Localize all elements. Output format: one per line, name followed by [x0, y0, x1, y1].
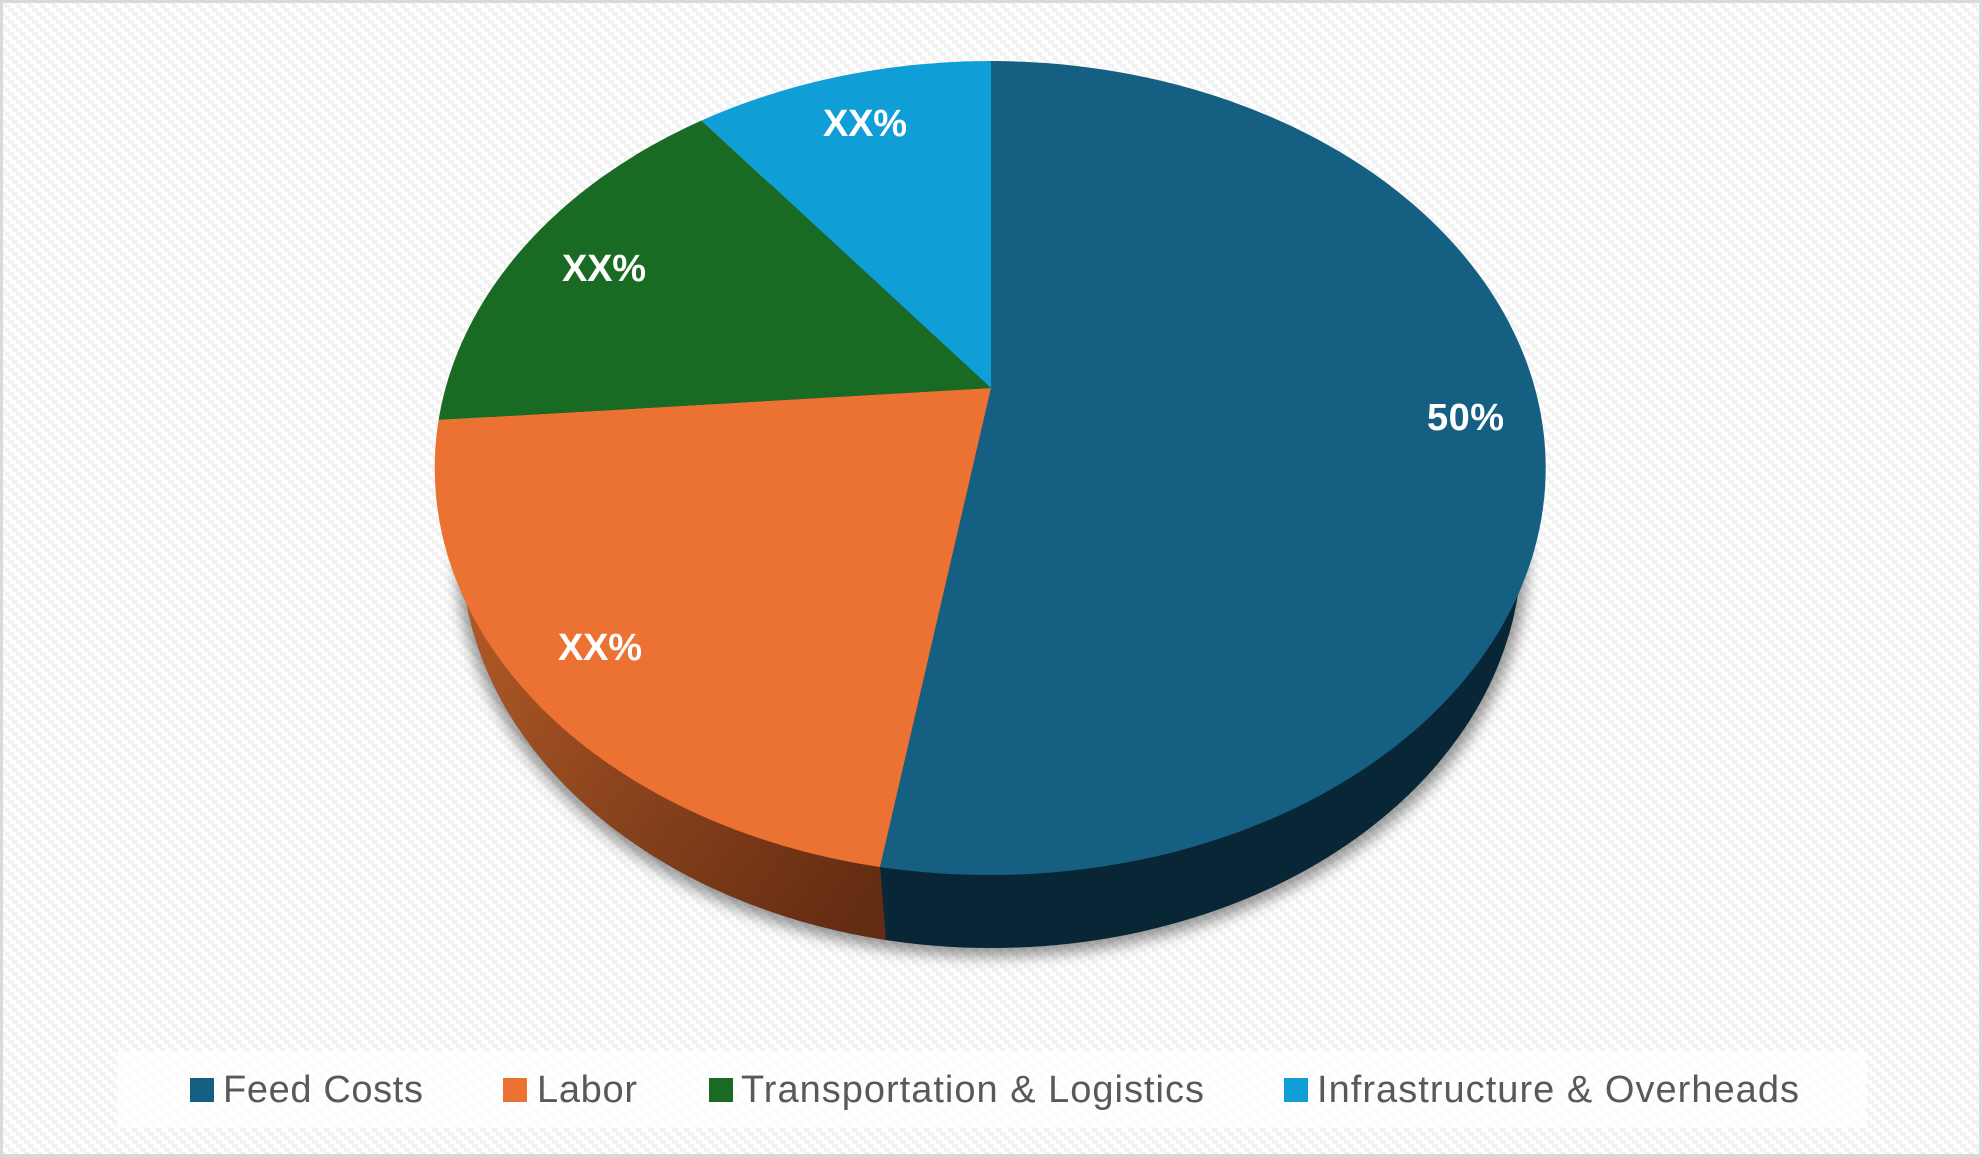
pie drop shadow — [456, 151, 1528, 957]
legend — [117, 1051, 1866, 1128]
side wall: feed costs — [462, 148, 1522, 948]
slice: labor — [435, 388, 991, 867]
legend item: feed costs: Feed Costs — [223, 1069, 423, 1111]
side wall: labor — [462, 500, 886, 940]
legend item: infrastructure and overheads: Infrastructure & Overheads — [1317, 1069, 1799, 1111]
3D pie chart — [435, 61, 1546, 957]
data label: infrastructure and overheads: XX% — [823, 103, 907, 145]
data label: labor: XX% — [558, 627, 642, 669]
legend item: transportation and logistics: Transportation & Logistics — [741, 1069, 1204, 1111]
legend item: labor: Labor — [537, 1069, 637, 1111]
data label: transportation and logistics: XX% — [562, 248, 646, 290]
legend band — [117, 1051, 1866, 1128]
data label: feed costs: 50% — [1427, 397, 1504, 439]
slice: transportation and logistics — [439, 120, 991, 420]
slice: feed costs — [880, 61, 1546, 875]
slice: infrastructure and overheads — [702, 61, 991, 388]
